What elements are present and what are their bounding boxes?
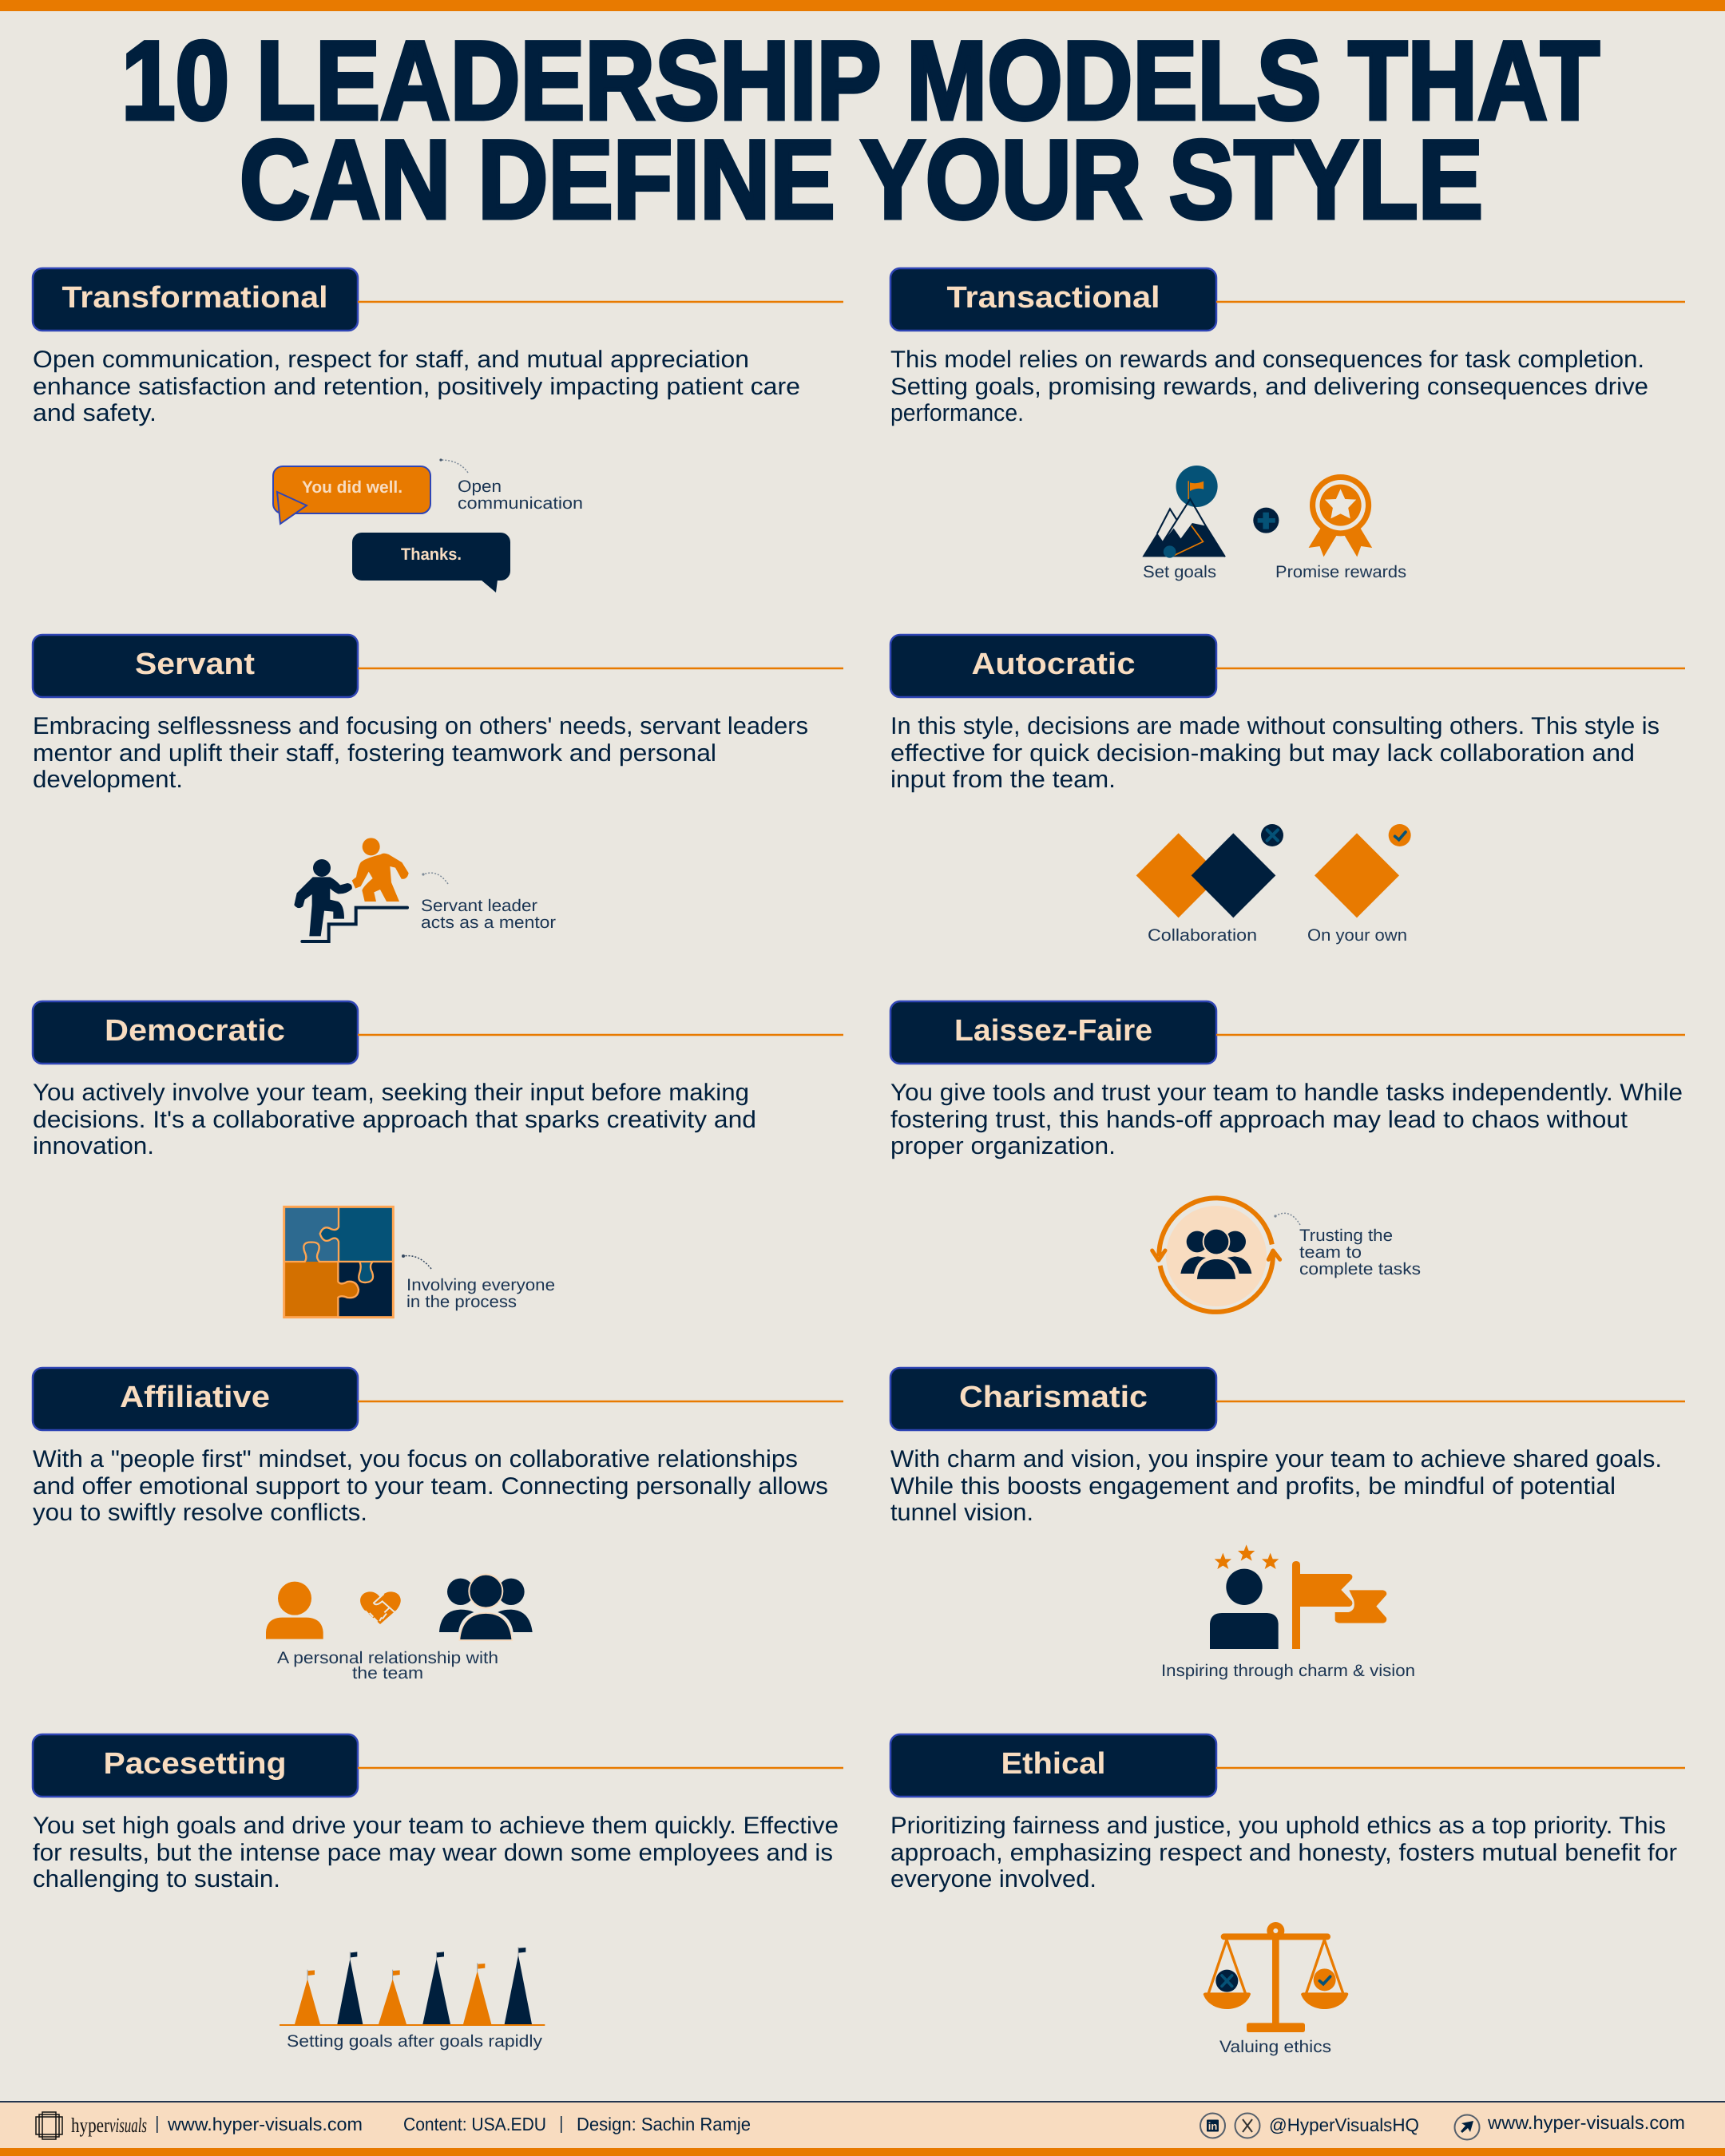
text: Pacesetting description: You set high goals and drive your team to achieve them quickly. Effective (33, 1813, 839, 1839)
text: Charismatic description: tunnel vision. (890, 1500, 1033, 1526)
panel: Servant (33, 635, 843, 941)
title: CAN DEFINE YOUR STYLE (240, 117, 1483, 242)
heading: Transformational (33, 268, 358, 331)
text: Laissez-Faire description (890, 1080, 1683, 1159)
icon: collaboration diamonds (1136, 824, 1283, 917)
label: a personal relationship: A personal relationship with (277, 1649, 498, 1667)
text: Transformational description: and safety. (33, 400, 157, 426)
label: trusting the team: complete tasks (1299, 1260, 1421, 1278)
icon: leader with stars (1210, 1544, 1279, 1649)
text: Servant description: Embracing selflessness and focusing on others' needs, servant leaders (33, 713, 808, 739)
label: trusting the team (1299, 1227, 1421, 1278)
text: Affiliative description: With a "people first" mindset, you focus on collaborative relationships (33, 1446, 798, 1472)
text: Laissez-Faire description: proper organization. (890, 1133, 1116, 1159)
title (121, 18, 1600, 242)
label: setting goals: Setting goals after goals rapidly (287, 2032, 543, 2051)
icon: heart handshake (360, 1591, 401, 1624)
icon: peaks with flags (280, 1947, 545, 2026)
logo wordmark: hyper (71, 2114, 109, 2137)
text: Affiliative description: and offer emotional support to your team. Connecting personally allows (33, 1473, 828, 1500)
text: Autocratic description: In this style, decisions are made without consulting others. This style is (890, 713, 1660, 739)
footer link: website: www.hyper-visuals.com (167, 2114, 363, 2134)
heading: Ethical (890, 1734, 1216, 1797)
icon: speech bubble You did well (273, 466, 430, 524)
icon: linkedin (1200, 2113, 1225, 2138)
text: Ethical description: everyone involved. (890, 1866, 1096, 1892)
text: Democratic description: decisions. It's a collaborative approach that sparks creativity and (33, 1107, 756, 1133)
heading: Ethical: Ethical (1001, 1747, 1105, 1781)
icon: speech bubble You did well: You did well. (302, 478, 402, 497)
footer handle: @HyperVisualsHQ (1269, 2114, 1419, 2135)
label: promise rewards: Promise rewards (1275, 563, 1406, 581)
heading: Affiliative (33, 1368, 358, 1430)
label: involving everyone (406, 1276, 555, 1311)
text: Democratic description (33, 1080, 756, 1159)
arrow: servant leader pointer (422, 873, 448, 884)
text: Transactional description (890, 347, 1648, 426)
text: Autocratic description: effective for quick decision-making but may lack collaboration and (890, 740, 1635, 767)
label: valuing ethics: Valuing ethics (1219, 2038, 1331, 2056)
icon: linkedin: in (1208, 2120, 1217, 2132)
label: open communication (458, 478, 583, 513)
text: Affiliative description: you to swiftly resolve conflicts. (33, 1500, 367, 1526)
icon: mentor on stairs (294, 838, 409, 941)
text: Laissez-Faire description: You give tools and trust your team to handle tasks independently. While (890, 1080, 1683, 1106)
heading: Charismatic: Charismatic (959, 1381, 1148, 1414)
text: Ethical description: approach, emphasizing respect and honesty, fosters mutual benefit for (890, 1840, 1677, 1866)
heading: Democratic: Democratic (105, 1014, 285, 1048)
heading: Charismatic (890, 1368, 1216, 1430)
footer (0, 2101, 1725, 2156)
icon: reward badge (1309, 474, 1372, 557)
icon: hypervisuals logo (36, 2112, 62, 2139)
icon: on your own diamond (1315, 824, 1411, 917)
text: Ethical description (890, 1813, 1677, 1892)
icon: speech bubble Thanks (352, 533, 510, 593)
top accent bar (0, 0, 1725, 11)
label: set goals: Set goals (1143, 563, 1216, 581)
label: collaboration: Collaboration (1148, 926, 1257, 945)
label: servant leader (421, 897, 556, 932)
label: open communication: communication (458, 494, 583, 513)
icon: x (1235, 2113, 1260, 2138)
text: Charismatic description: With charm and vision, you inspire your team to achieve shared goals. (890, 1446, 1662, 1472)
icon: puzzle (284, 1207, 393, 1318)
label: trusting the team: team to (1299, 1243, 1362, 1262)
label: on your own: On your own (1307, 926, 1407, 945)
text: Charismatic description: While this boosts engagement and profits, be mindful of potential (890, 1473, 1616, 1500)
label: a personal relationship (277, 1649, 498, 1682)
icon: team (439, 1575, 533, 1640)
label: a personal relationship: the team (352, 1664, 423, 1682)
panel: Charismatic (890, 1368, 1685, 1680)
text: Democratic description: innovation. (33, 1133, 154, 1159)
text: Pacesetting description (33, 1813, 839, 1892)
text: Transformational description: Open communication, respect for staff, and mutual appreciation (33, 347, 749, 373)
logo wordmark (71, 2114, 147, 2137)
label: involving everyone: Involving everyone (406, 1276, 555, 1294)
text: Charismatic description (890, 1446, 1662, 1526)
heading: Autocratic: Autocratic (971, 648, 1136, 681)
text: Transactional description: This model relies on rewards and consequences for task completion. (890, 347, 1644, 373)
panel: Ethical (890, 1734, 1685, 2056)
heading: Laissez-Faire: Laissez-Faire (954, 1014, 1152, 1048)
footer link: website right: www.hyper-visuals.com (1487, 2112, 1685, 2133)
arrow: involving pointer (402, 1254, 431, 1269)
text: Transformational description (33, 347, 800, 426)
panel: Pacesetting (33, 1734, 843, 2051)
heading: Transactional (890, 268, 1216, 331)
text: Transactional description: Setting goals, promising rewards, and delivering consequences drive (890, 374, 1648, 400)
panel: Democratic (33, 1001, 843, 1318)
panel: Transformational (33, 268, 843, 593)
icon: flag (1292, 1561, 1386, 1649)
text: Ethical description: Prioritizing fairness and justice, you uphold ethics as a top priority. This (890, 1813, 1666, 1839)
arrow: trusting pointer (1274, 1213, 1300, 1225)
icon: balance scale (1204, 1922, 1348, 2032)
icon: team in cycle (1152, 1198, 1280, 1312)
heading: Affiliative: Affiliative (120, 1381, 270, 1414)
text: Pacesetting description: for results, but the intense pace may wear down some employees and is (33, 1840, 833, 1866)
footer credit: design: Design: Sachin Ramje (577, 2114, 751, 2134)
icon: person (266, 1582, 323, 1639)
text: Affiliative description (33, 1446, 828, 1526)
text: Pacesetting description: challenging to sustain. (33, 1866, 280, 1892)
text: Transformational description: enhance satisfaction and retention, positively impacting patient care (33, 374, 800, 400)
icon: mountain with flag (1142, 466, 1225, 558)
text: Transactional description: performance. (890, 400, 1024, 426)
arrow: open communication pointer (439, 458, 468, 473)
heading: Pacesetting: Pacesetting (104, 1747, 286, 1781)
panel: Transactional (890, 268, 1685, 581)
icon: cursor arrow (1455, 2114, 1479, 2140)
icon: plus (1253, 508, 1279, 533)
heading: Laissez-Faire (890, 1001, 1216, 1064)
text: Laissez-Faire description: fostering trust, this hands-off approach may lead to chaos without (890, 1107, 1628, 1133)
heading: Transactional: Transactional (947, 281, 1160, 315)
text: Servant description (33, 713, 808, 793)
text: Autocratic description: input from the team. (890, 767, 1116, 793)
panel: Autocratic (890, 635, 1685, 945)
heading: Democratic (33, 1001, 358, 1064)
heading: Pacesetting (33, 1734, 358, 1797)
heading: Servant: Servant (135, 648, 255, 681)
label: inspiring: Inspiring through charm & vision (1161, 1662, 1415, 1680)
heading: Servant (33, 635, 358, 697)
heading: Autocratic (890, 635, 1216, 697)
panel: Affiliative (33, 1368, 843, 1682)
footer credit: content: Content: USA.EDU (403, 2114, 546, 2134)
text: Democratic description: You actively involve your team, seeking their input before making (33, 1080, 749, 1106)
panel: Laissez-Faire (890, 1001, 1685, 1312)
text: Autocratic description (890, 713, 1660, 793)
label: trusting the team: Trusting the (1299, 1227, 1393, 1245)
heading: Transformational: Transformational (62, 281, 327, 315)
label: involving everyone: in the process (406, 1293, 517, 1311)
logo wordmark: visuals (109, 2114, 147, 2137)
text: Servant description: development. (33, 767, 183, 793)
text: Servant description: mentor and uplift their staff, fostering teamwork and personal (33, 740, 716, 767)
label: servant leader: Servant leader (421, 897, 537, 915)
icon: speech bubble Thanks: Thanks. (401, 545, 462, 564)
label: servant leader: acts as a mentor (421, 914, 556, 932)
label: open communication: Open (458, 478, 502, 496)
